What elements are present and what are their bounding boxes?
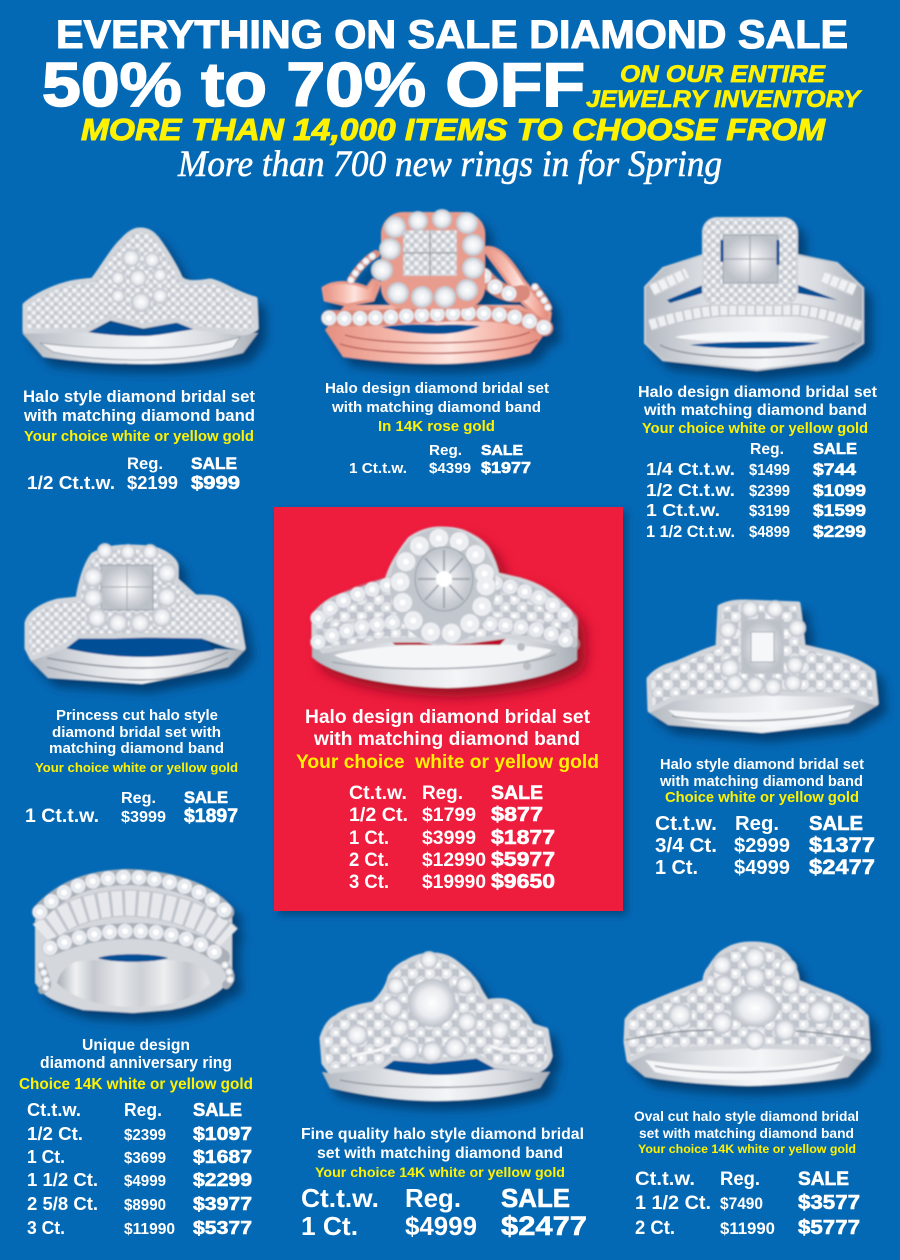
ring image [312,528,577,688]
price table: $744 [813,460,857,479]
price table: Reg. [127,454,163,473]
price table: $2399 [749,483,790,500]
price table: 1 1/2 Ct.t.w. [646,522,735,541]
description: Your choice 14K white or yellow gold [315,1164,565,1180]
price table: 1 Ct. [27,1147,65,1167]
price table: $4899 [749,524,790,541]
price table: $3577 [798,1192,860,1214]
price table: $1377 [809,834,875,857]
description [19,1037,253,1093]
subhead: on our entire: ON OUR ENTIRE [620,61,826,88]
product: fine quality halo set [301,951,587,1241]
subhead: more than 14,000 items: MORE THAN 14,000 ITEMS TO CHOOSE FROM [81,112,826,147]
price table [349,783,555,893]
description [325,380,549,435]
product: princess cut halo set [25,543,245,827]
description: Fine quality halo style diamond bridal [301,1126,584,1143]
ring image [27,543,245,684]
description: matching diamond band [49,741,224,757]
price table [301,1183,587,1241]
price table: Reg. [422,783,463,804]
description: with matching diamond band [643,401,867,419]
price table: $2299 [193,1169,252,1190]
price table: 3 Ct. [349,872,389,893]
ring image [35,870,232,1013]
subhead: jewelry inventory: JEWELRY INVENTORY [586,86,862,113]
price table: Reg. [735,813,779,835]
price table: $4999 [124,1173,166,1190]
description [634,1109,859,1156]
price table: SALE [481,442,523,459]
price table: $4999 [734,857,790,879]
price table: Reg. [720,1168,760,1190]
price table: Ct.t.w. [301,1183,379,1213]
price table: $2299 [813,522,866,541]
price table: $5777 [798,1217,860,1239]
price table: 2 Ct. [635,1217,675,1239]
description [301,1126,584,1180]
price table: Ct.t.w. [349,783,407,804]
price table: 1 1/2 Ct. [635,1192,711,1214]
description: set with matching diamond band [317,1145,563,1162]
description: Your choice white or yellow gold [35,760,238,775]
price table: SALE [184,789,228,807]
description: Halo design diamond bridal set [305,707,591,728]
price table: $999 [191,473,240,493]
price table: $5977 [491,849,555,871]
price table: $1599 [813,501,866,520]
price table: SALE [501,1183,570,1213]
price table: $1977 [481,460,531,477]
ring image [648,600,878,733]
price table: Reg. [124,1100,162,1120]
price table: $11990 [720,1220,775,1238]
price table: $2199 [127,473,178,493]
description [23,387,255,445]
product: anniversary ring [19,870,253,1238]
price table: 1 Ct. [349,828,389,849]
description: Oval cut halo style diamond bridal [634,1109,859,1124]
price table: $12990 [422,850,486,871]
price table: $1499 [749,462,790,479]
price table: SALE [809,813,863,835]
headline: 50% to 70% off: 50% to 70% OFF [42,51,585,120]
price table: 1 1/2 Ct. [27,1170,98,1190]
price table: 1/2 Ct.t.w. [27,473,115,493]
price table: Reg. [750,441,784,458]
price table: $1877 [491,827,555,849]
description [35,708,238,775]
ring image [323,209,552,364]
price table: Ct.t.w. [655,813,717,835]
price table: $19990 [422,872,486,893]
description: with matching diamond band [313,729,580,750]
price table: 1 Ct.t.w. [349,460,407,477]
description: with matching diamond band [23,406,255,425]
description: Halo design diamond bridal set [325,380,549,397]
price table: $2477 [809,856,875,879]
price table: $1799 [422,805,476,826]
product: princess halo set with channel band [638,218,878,541]
price table [25,789,238,827]
description: Halo style diamond bridal set [660,757,864,773]
price table: 1 Ct. [655,857,698,879]
price table: Reg. [405,1183,461,1213]
header [42,13,862,185]
description: set with matching diamond band [639,1126,854,1141]
price table [635,1168,860,1239]
description: Your choice white or yellow gold [24,429,254,445]
panel: featured red offer [274,507,623,911]
price table: 1/2 Ct. [349,805,408,826]
price table: $3999 [121,809,166,826]
product: pear halo set [22,230,258,493]
price table: 1 Ct.t.w. [646,500,720,520]
tagline: More than 700 new rings in for Spring [177,144,722,185]
price table: $5377 [193,1217,252,1238]
description: Choice white or yellow gold [665,790,859,806]
description: Halo design diamond bridal set [638,383,878,401]
price table: Ct.t.w. [27,1100,81,1120]
price table: $2477 [501,1211,587,1241]
description: Your choice white or yellow gold [642,421,868,437]
description: Your choice 14K white or yellow gold [638,1142,856,1156]
red panel background [274,507,623,911]
price table: 2 Ct. [349,850,389,871]
description: In 14K rose gold [378,418,495,435]
price table: 3 Ct. [27,1218,65,1238]
description: with matching diamond band [331,399,541,416]
price table: $4399 [429,460,471,477]
ring image [645,218,863,370]
price table [27,1100,252,1238]
price table [655,813,875,879]
price table: $3699 [124,1150,166,1167]
price table: SALE [193,1100,242,1120]
description: diamond bridal set with [52,725,221,741]
product: oval cut halo set [625,944,870,1239]
description [296,707,599,773]
headline: everything on sale: EVERYTHING ON SALE DIAMOND SALE [56,13,848,57]
price table: SALE [798,1168,849,1190]
description: Unique design [82,1037,190,1054]
price table: Reg. [121,790,156,807]
description: with matching diamond band [659,774,863,790]
description: diamond anniversary ring [40,1054,232,1072]
description [638,383,878,437]
price table: $2399 [124,1127,166,1144]
price table [646,441,866,541]
price table: $1099 [813,481,866,500]
description: Princess cut halo style [56,708,218,724]
price table: 1/4 Ct.t.w. [646,459,735,479]
description: Your choice white or yellow gold [296,752,599,773]
price table: $11990 [124,1221,175,1238]
price table: 1/2 Ct.t.w. [646,480,735,500]
price table: $2999 [734,835,790,857]
description: Halo style diamond bridal set [23,387,255,406]
price table: $3977 [193,1193,252,1214]
price table: Ct.t.w. [635,1168,695,1190]
product: emerald cut halo set [648,600,878,879]
price table: $4999 [405,1211,477,1241]
price table: $8990 [124,1197,166,1214]
price table: $9650 [491,871,555,893]
price table: 2 5/8 Ct. [27,1194,98,1214]
price table: SALE [491,783,543,804]
price table: 3/4 Ct. [655,835,717,857]
price table: $3199 [749,503,790,520]
ring image [625,944,870,1086]
price table: Reg. [429,442,462,459]
price table [27,454,240,493]
ring image [22,230,258,364]
price table: $1897 [184,806,238,827]
price table: SALE [813,441,857,458]
description: Choice 14K white or yellow gold [19,1076,253,1093]
description [659,757,864,806]
price table: 1 Ct. [301,1211,358,1241]
price table: $1097 [193,1123,252,1144]
price table: SALE [191,454,237,473]
ring image [322,951,550,1101]
price table: $1687 [193,1146,252,1167]
product: rose gold set [323,209,552,477]
price table: $3999 [422,828,476,849]
price table: $7490 [720,1195,763,1213]
price table [349,442,531,477]
price table: 1/2 Ct. [27,1124,83,1144]
price table: 1 Ct.t.w. [25,806,99,827]
price table: $877 [491,804,543,826]
